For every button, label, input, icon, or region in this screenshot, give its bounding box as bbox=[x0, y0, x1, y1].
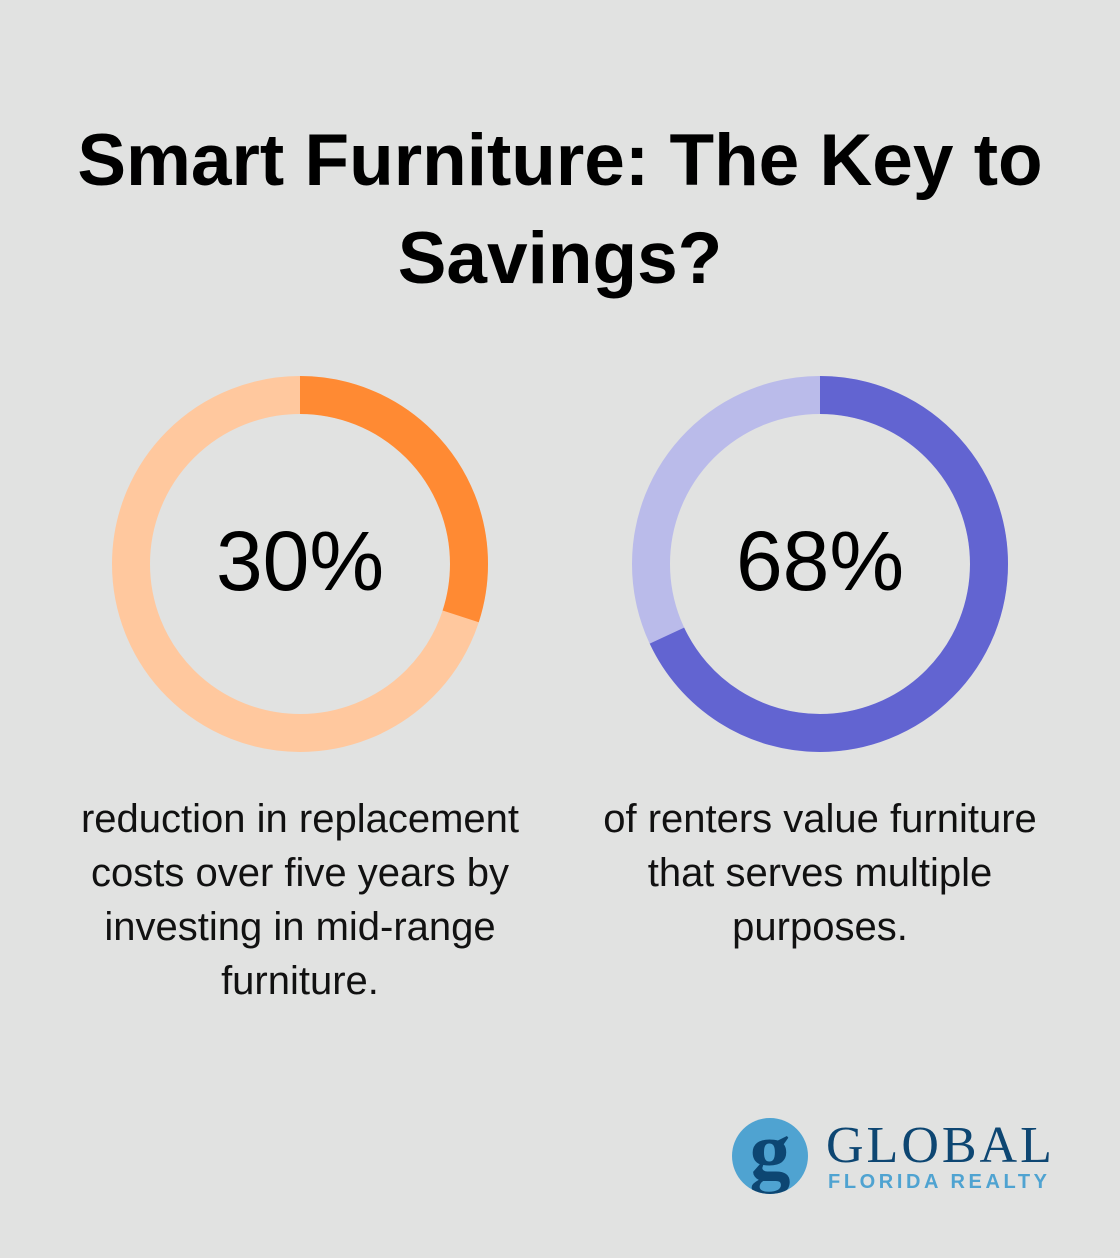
logo text: GLOBAL bbox=[826, 1117, 1055, 1174]
icon: logo circle bbox=[732, 1118, 808, 1194]
donut: 30% bbox=[112, 376, 488, 752]
title: Smart Furniture: The Key to bbox=[77, 120, 1043, 201]
description: 30%: reduction in replacement costs over five years by investing in mid-range furniture. bbox=[81, 797, 519, 1003]
description: 68%: of renters value furniture that serves multiple purposes. bbox=[603, 797, 1037, 949]
stat: 68%: 68% bbox=[736, 514, 904, 608]
title bbox=[77, 120, 1043, 299]
title: Savings? bbox=[398, 218, 722, 299]
logo: FLORIDA REALTY bbox=[828, 1171, 1051, 1193]
stat: 30%: 30% bbox=[216, 514, 384, 608]
logo bbox=[732, 1117, 1055, 1194]
donut: 68% bbox=[632, 376, 1008, 752]
